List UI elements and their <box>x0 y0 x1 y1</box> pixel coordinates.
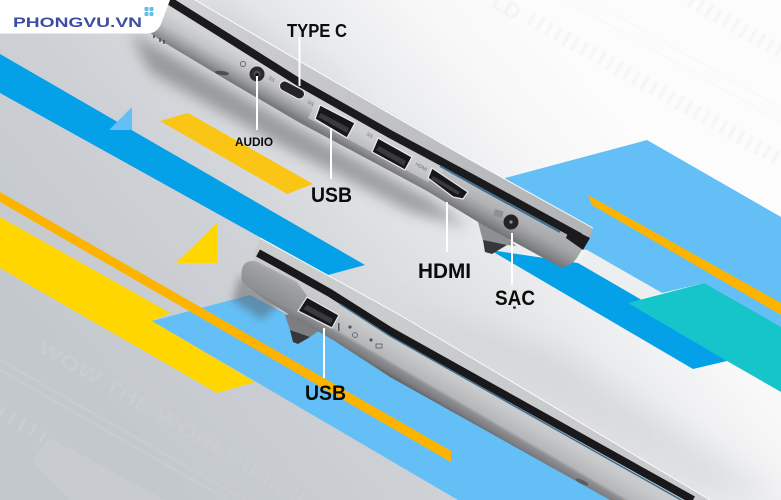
right end darkening <box>350 88 593 267</box>
port: USB A second <box>372 138 412 170</box>
parallelogram: teal <box>628 283 781 392</box>
speaker slot <box>215 70 229 76</box>
stripe: blue upper <box>0 54 365 275</box>
callout line: TYPE C <box>298 37 300 86</box>
blue reflection <box>340 304 690 500</box>
laptop foot: top <box>478 222 516 254</box>
port: USB A first <box>315 105 355 138</box>
triangle: light blue <box>109 107 132 130</box>
callout line: SAC <box>511 233 513 285</box>
callout line: AUDIO <box>256 76 258 130</box>
callout line: USB bottom <box>323 328 325 378</box>
triangle: yellow <box>176 223 217 263</box>
stripe: orange long <box>0 192 451 462</box>
laptop body top <box>105 0 593 267</box>
laptop: top, side view <box>105 0 593 267</box>
label: AUDIO: AUDIO <box>235 135 273 149</box>
port: USB-C <box>278 79 306 101</box>
port: HDMI <box>428 168 468 199</box>
speaker slot <box>575 477 589 487</box>
panel: light blue lower <box>152 295 640 500</box>
callout line: HDMI <box>446 202 448 252</box>
stripe: orange right <box>588 195 781 315</box>
logo dots <box>144 7 154 16</box>
label: USB bottom: USB <box>305 382 346 405</box>
lid highlight <box>260 238 710 500</box>
label: TYPE C: TYPE C <box>287 21 347 41</box>
port: power jack <box>504 214 518 230</box>
lid strip <box>168 0 593 237</box>
laptop body bottom <box>242 238 710 500</box>
callout line: USB top <box>330 128 332 179</box>
blue reflection <box>440 166 560 232</box>
stripe: pale strip <box>578 250 662 299</box>
tiny port text: SS <box>365 132 374 140</box>
laptop: bottom, side view <box>242 238 710 500</box>
tiny port text <box>267 76 428 173</box>
parallelogram: amber <box>160 113 313 194</box>
stripe: blue lower <box>490 250 727 369</box>
black gap <box>258 253 693 500</box>
tiny port text: SS <box>267 76 276 84</box>
logo text: PHONGVU.VN <box>13 14 142 30</box>
label: SAC: SẠC <box>495 287 535 310</box>
power mark <box>493 209 504 218</box>
port: audio jack <box>250 66 264 82</box>
tiny port text: HDMI <box>414 162 428 173</box>
black gap <box>168 0 580 237</box>
label: USB top: USB <box>311 184 352 207</box>
port: USB A bottom <box>298 297 339 328</box>
lid highlight <box>195 0 593 228</box>
ghost text: WOW THE WORLD: WOW THE WORLD <box>34 337 247 472</box>
stripe: yellow large <box>0 217 255 393</box>
status icons <box>338 323 382 348</box>
panel: light blue upper right <box>505 140 781 330</box>
tiny port text: SS <box>306 100 315 108</box>
tick marks <box>154 35 164 44</box>
label: HDMI: HDMI <box>418 260 471 283</box>
icon: headset mark <box>240 61 246 67</box>
hinge slot <box>566 228 590 250</box>
hinge cap <box>242 261 310 318</box>
logo panel <box>0 0 170 34</box>
laptop foot: bottom <box>285 312 323 344</box>
port row highlight <box>308 98 445 182</box>
white panel <box>0 0 170 34</box>
lid strip <box>255 238 710 500</box>
